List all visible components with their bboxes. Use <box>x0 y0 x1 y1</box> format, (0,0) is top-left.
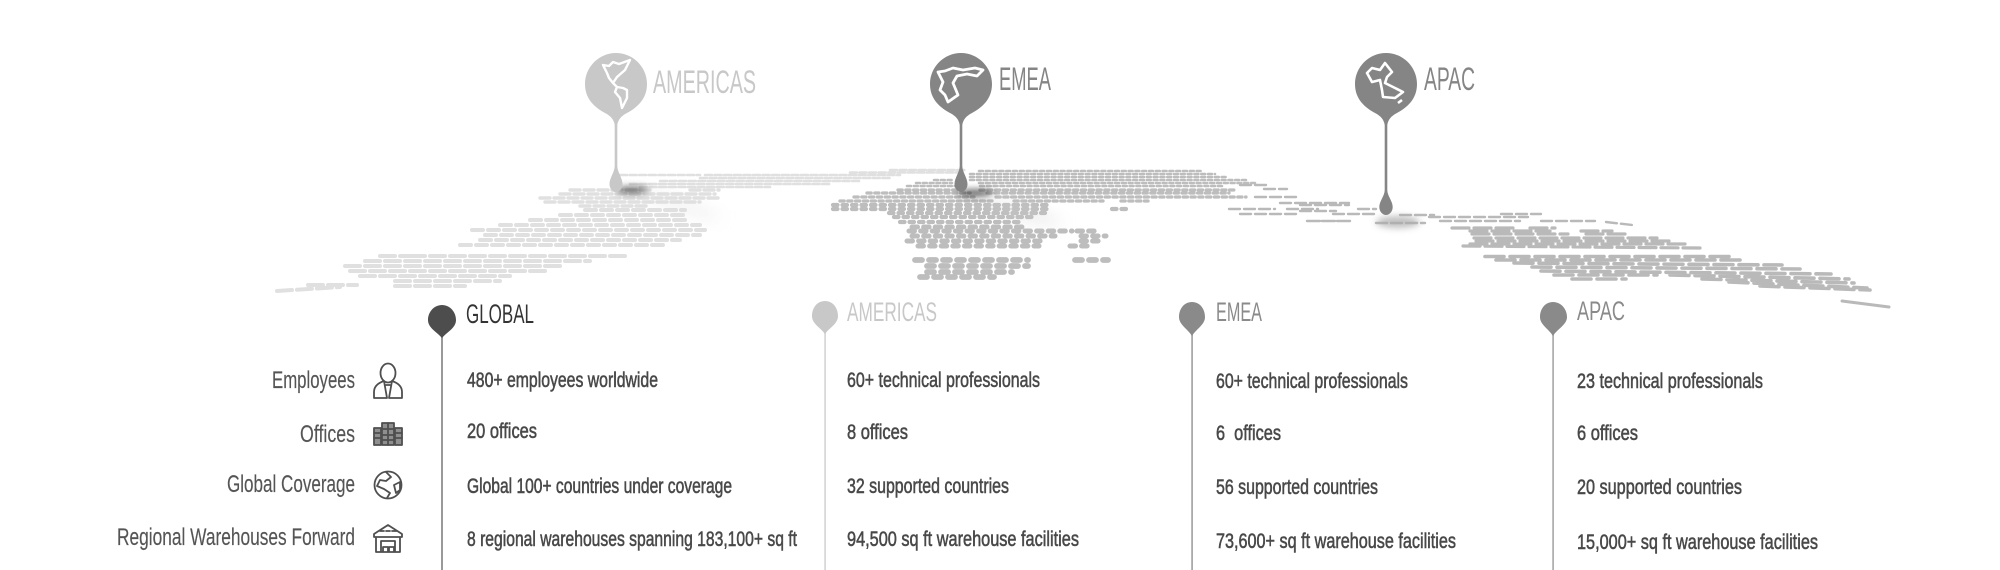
pin: AMERICAS <box>812 301 838 570</box>
column: EMEA <box>1179 297 1456 570</box>
label: Employees: Employees <box>272 367 355 394</box>
icon: warehouse <box>374 525 402 552</box>
stat: coverage: Global 100+ countries under coverage <box>467 475 732 498</box>
column: APAC <box>1540 296 1818 570</box>
icon: emea continents <box>938 68 983 102</box>
label: Global Coverage: Global Coverage <box>227 471 355 498</box>
stat: professionals: 60+ technical professionals <box>847 369 1040 392</box>
stat: professionals: 60+ technical professionals <box>1216 370 1408 393</box>
stat: countries: 20 supported countries <box>1577 476 1742 499</box>
stat: warehouses: 73,600+ sq ft warehouse facilities <box>1216 530 1456 553</box>
stat: countries: 32 supported countries <box>847 475 1009 498</box>
column: AMERICAS <box>812 297 1079 570</box>
stat: warehouses: 15,000+ sq ft warehouse facilities <box>1577 531 1818 554</box>
map pin: Americas <box>585 53 647 192</box>
heading: EMEA: EMEA <box>1216 297 1262 327</box>
stat: offices: 6 offices <box>1216 422 1281 445</box>
stat: offices: 6 offices <box>1577 422 1638 445</box>
label: APAC: APAC <box>1424 61 1475 97</box>
row labels with icons <box>117 364 402 552</box>
label: EMEA: EMEA <box>999 61 1051 97</box>
stat: employees: 480+ employees worldwide <box>467 369 658 392</box>
world dot map <box>277 170 1889 307</box>
map region: EMEA <box>833 171 1255 277</box>
heading: AMERICAS: AMERICAS <box>847 297 937 327</box>
stat: offices: 8 offices <box>847 421 908 444</box>
pin: GLOBAL <box>428 305 456 570</box>
stat: offices: 20 offices <box>467 420 537 443</box>
heading: GLOBAL: GLOBAL <box>466 299 534 329</box>
stat: warehouses: 94,500 sq ft warehouse facilities <box>847 528 1079 551</box>
icon: americas continents <box>603 60 630 108</box>
map region: Americas <box>277 170 965 291</box>
icon: person <box>374 364 402 398</box>
stat: warehouses: 8 regional warehouses spanning 183,100+ sq ft <box>467 528 797 551</box>
icon: apac continents <box>1367 63 1403 103</box>
map pin: APAC <box>1355 53 1417 215</box>
pin: EMEA <box>1179 302 1205 570</box>
stat: countries: 56 supported countries <box>1216 476 1378 499</box>
label: Regional Warehouses Forward: Regional Warehouses Forward <box>117 524 355 551</box>
column: GLOBAL <box>428 299 797 570</box>
map region: APAC <box>1229 185 1889 307</box>
label: AMERICAS: AMERICAS <box>653 64 756 100</box>
stat: professionals: 23 technical professionals <box>1577 370 1763 393</box>
icon: building <box>374 423 402 445</box>
map pin: EMEA <box>930 53 992 192</box>
pin: APAC <box>1540 302 1567 570</box>
icon: globe <box>374 472 402 498</box>
label: Offices: Offices <box>300 421 355 448</box>
heading: APAC: APAC <box>1577 296 1625 326</box>
pin shadows <box>616 186 1420 229</box>
